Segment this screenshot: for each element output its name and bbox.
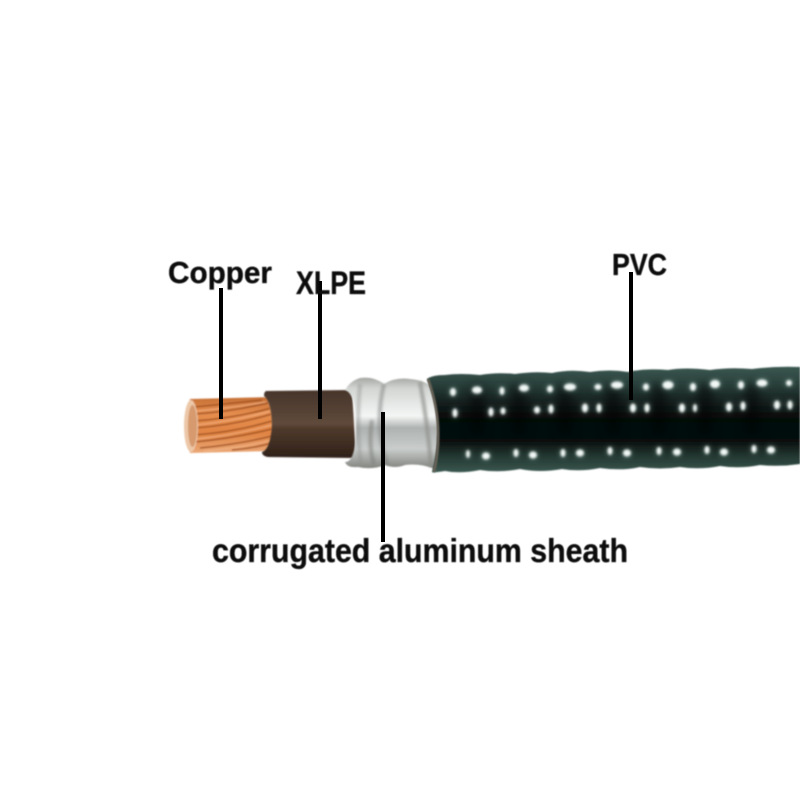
- label: corrugated aluminum sheath: corrugated aluminum sheath: [212, 532, 628, 569]
- copper conductor: [184, 396, 277, 453]
- corrugated aluminum sheath: [345, 378, 441, 469]
- jacket highlight glow: [450, 380, 792, 460]
- copper strands: [194, 400, 272, 451]
- leader line: PVC: [629, 272, 633, 400]
- label: XLPE: XLPE: [296, 265, 366, 301]
- jacket shading bands: [470, 385, 759, 435]
- leader line: XLPE: [318, 281, 322, 419]
- jacket highlights: [450, 380, 792, 460]
- labels: [168, 247, 667, 569]
- label: Copper: Copper: [168, 255, 272, 290]
- leader line: aluminum sheath: [381, 412, 385, 542]
- leader line: copper: [219, 288, 223, 419]
- XLPE insulation: [262, 390, 356, 458]
- label: PVC: PVC: [612, 247, 667, 282]
- PVC outer jacket: [427, 367, 800, 472]
